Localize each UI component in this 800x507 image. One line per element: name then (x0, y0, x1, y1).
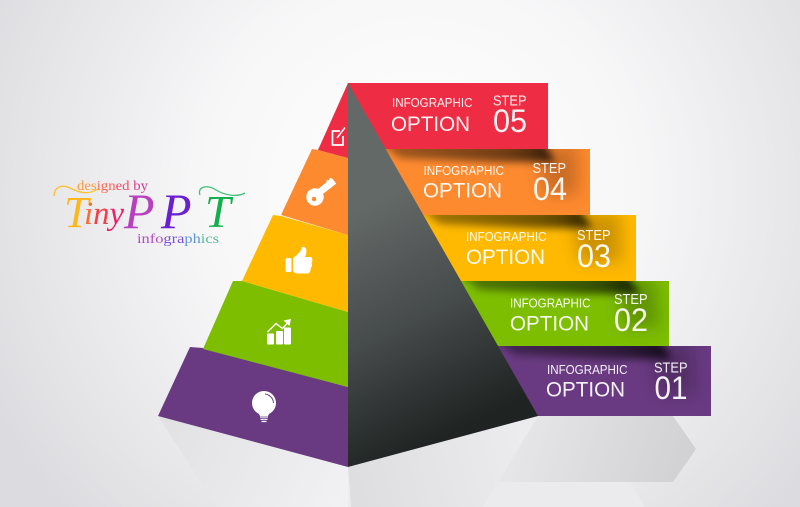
logo: designed by Tiny PPT infographics: iny (84, 196, 124, 232)
pyramid left face: purple tier (158, 347, 348, 467)
logo: designed by Tiny PPT infographics: P (123, 183, 155, 239)
logo: designed by Tiny PPT infographics: P (160, 183, 192, 239)
panel: step 03 band (423, 215, 636, 281)
panel: step 05 band (348, 83, 548, 149)
panel: step 03 band: STEP (577, 228, 610, 244)
floor reflection (158, 416, 696, 507)
panel: step 04 band: INFOGRAPHIC (424, 164, 504, 178)
panel: step 01 band: INFOGRAPHIC (547, 363, 628, 377)
pyramid left face: red tier (318, 83, 348, 158)
panel: step 03 band: OPTION (466, 245, 545, 269)
panel: step 02 band: OPTION (510, 312, 589, 336)
panel: step 04 band (386, 149, 590, 215)
panel: step 02 band: STEP (614, 292, 648, 308)
panel: step 01 band: STEP (654, 360, 688, 376)
icon: growth chart (267, 319, 291, 344)
panel: step 03 band: INFOGRAPHIC (466, 230, 546, 244)
panel: step 02 band: INFOGRAPHIC (510, 296, 590, 310)
logo: designed by Tiny PPT infographics: info graphics (137, 232, 219, 247)
panel: step 05 band: OPTION (391, 112, 470, 136)
pyramid left face: orange tier (281, 149, 348, 235)
pyramid left face: yellow tier (242, 215, 348, 312)
icon: key (303, 175, 340, 209)
icon: checkbox with pencil (332, 128, 345, 145)
panel: step 04 band: STEP (532, 161, 566, 177)
panel: step 04 band: OPTION (423, 178, 502, 202)
panel: step 05 band: STEP (493, 94, 526, 110)
panel: step 01 band: 01 (654, 370, 688, 406)
icon: light bulb (252, 391, 276, 422)
panel: step 05 band: 05 (493, 103, 527, 139)
panel: step 03 band: 03 (577, 238, 611, 274)
panel: step 01 band: OPTION (546, 378, 625, 402)
panel: step 01 band (498, 346, 711, 416)
logo: designed by Tiny PPT infographics (54, 179, 245, 247)
panel: step 02 band (461, 281, 669, 346)
logo: designed by Tiny PPT infographics: T (205, 186, 234, 237)
icon: thumbs up (286, 247, 312, 274)
pyramid left face: green tier (203, 281, 348, 387)
logo: designed by Tiny PPT infographics: T (64, 188, 92, 237)
panel: step 02 band: 02 (614, 302, 648, 338)
pyramid dark front face (348, 83, 538, 467)
panel: step 05 band: INFOGRAPHIC (392, 96, 472, 110)
logo: designed by Tiny PPT infographics: designed by (77, 179, 148, 194)
panel: step 04 band: 04 (533, 171, 567, 207)
